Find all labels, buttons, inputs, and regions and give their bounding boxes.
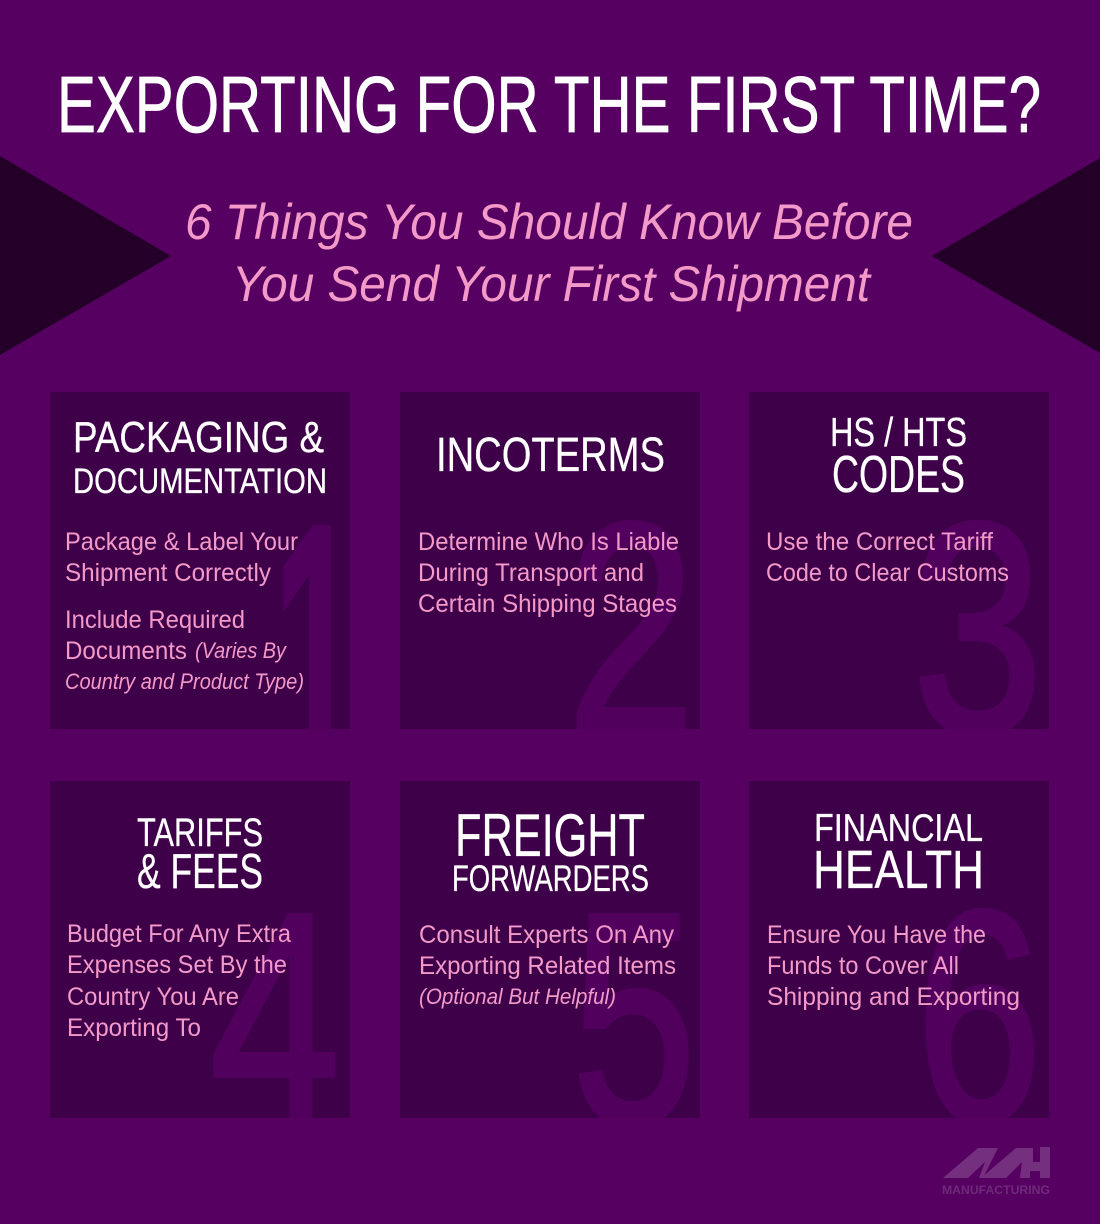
subtitle: You Send Your First Shipment: [232, 256, 872, 312]
body text: Country and Product Type): [65, 669, 304, 694]
logo: MH Manufacturing: [942, 1147, 1050, 1197]
heading: [73, 413, 327, 501]
panel: hs / hts codes: [749, 392, 1049, 729]
heading: HS / HTS: [830, 409, 967, 455]
heading: DOCUMENTATION: [73, 462, 327, 501]
body text: Ensure You Have the: [767, 921, 986, 949]
heading: FREIGHT: [455, 802, 645, 869]
body text: Use the Correct Tariff: [766, 528, 993, 556]
body text: Documents: [65, 637, 187, 665]
body text: Shipment Correctly: [65, 559, 271, 587]
icon: left triangle: [0, 156, 171, 355]
body text: Include Required: [65, 606, 245, 634]
body text: [418, 528, 679, 618]
body text: During Transport and: [418, 559, 644, 587]
body text: (Varies By: [195, 638, 288, 663]
panel: incoterms: [400, 392, 700, 729]
subtitle: [185, 194, 913, 312]
text: 1: [271, 459, 363, 839]
panel: financial health: [749, 781, 1049, 1118]
panel: tariffs and fees: [50, 781, 350, 1118]
body text: Exporting To: [67, 1014, 201, 1042]
body text: [65, 528, 304, 694]
heading: & FEES: [137, 845, 263, 899]
heading: [137, 811, 263, 899]
body text: (Optional But Helpful): [419, 984, 616, 1009]
panel: packaging and documentation: [50, 392, 350, 729]
body text: Code to Clear Customs: [766, 559, 1009, 587]
body text: [766, 528, 1009, 587]
heading: HEALTH: [813, 840, 984, 900]
heading: INCOTERMS: [436, 429, 665, 482]
heading: [813, 807, 984, 900]
number 5: 5: [572, 850, 696, 1186]
logo: MH Manufacturing: MANUFACTURING: [942, 1185, 1050, 1197]
heading: TARIFFS: [137, 811, 263, 855]
body text: Determine Who Is Liable: [418, 528, 679, 556]
heading: [452, 802, 649, 899]
body text: Certain Shipping Stages: [418, 590, 677, 618]
body text: Budget For Any Extra: [67, 920, 291, 948]
heading: FINANCIAL: [814, 807, 983, 850]
body text: Consult Experts On Any: [419, 921, 674, 949]
heading: [830, 409, 967, 504]
icon: right triangle: [932, 158, 1100, 353]
panel: freight forwarders: [400, 781, 700, 1118]
subtitle: 6 Things You Should Know Before: [185, 194, 913, 250]
heading: FORWARDERS: [452, 858, 649, 899]
number 2: 2: [567, 460, 695, 796]
body text: [767, 921, 1020, 1011]
body text: Expenses Set By the: [67, 951, 287, 979]
body text: Country You Are: [67, 983, 239, 1011]
body text: [67, 920, 291, 1042]
number 6: 6: [916, 848, 1042, 1184]
body text: Shipping and Exporting: [767, 983, 1020, 1011]
heading: PACKAGING &: [73, 413, 324, 462]
body text: Package & Label Your: [65, 528, 298, 556]
number 3: 3: [913, 460, 1043, 796]
body text: Exporting Related Items: [419, 952, 676, 980]
body text: Funds to Cover All: [767, 952, 959, 980]
heading: CODES: [832, 446, 965, 504]
body text: [419, 921, 676, 1009]
number 4: 4: [210, 850, 340, 1186]
